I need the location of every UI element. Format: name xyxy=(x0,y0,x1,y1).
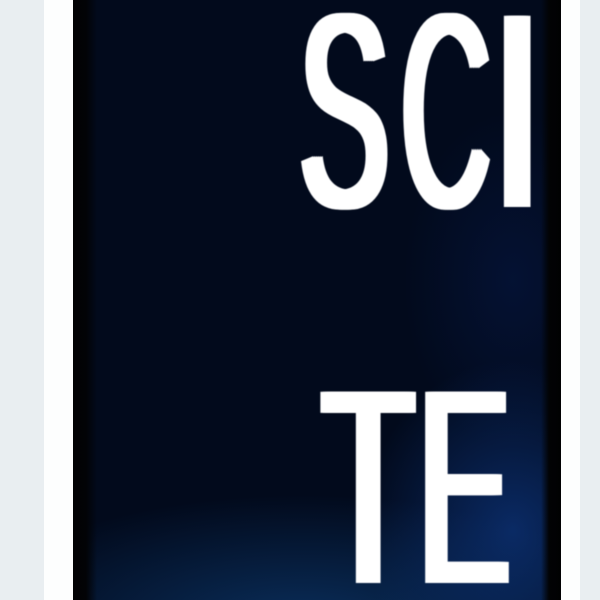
heading: SCI xyxy=(295,0,534,266)
heading: TE xyxy=(317,331,510,600)
